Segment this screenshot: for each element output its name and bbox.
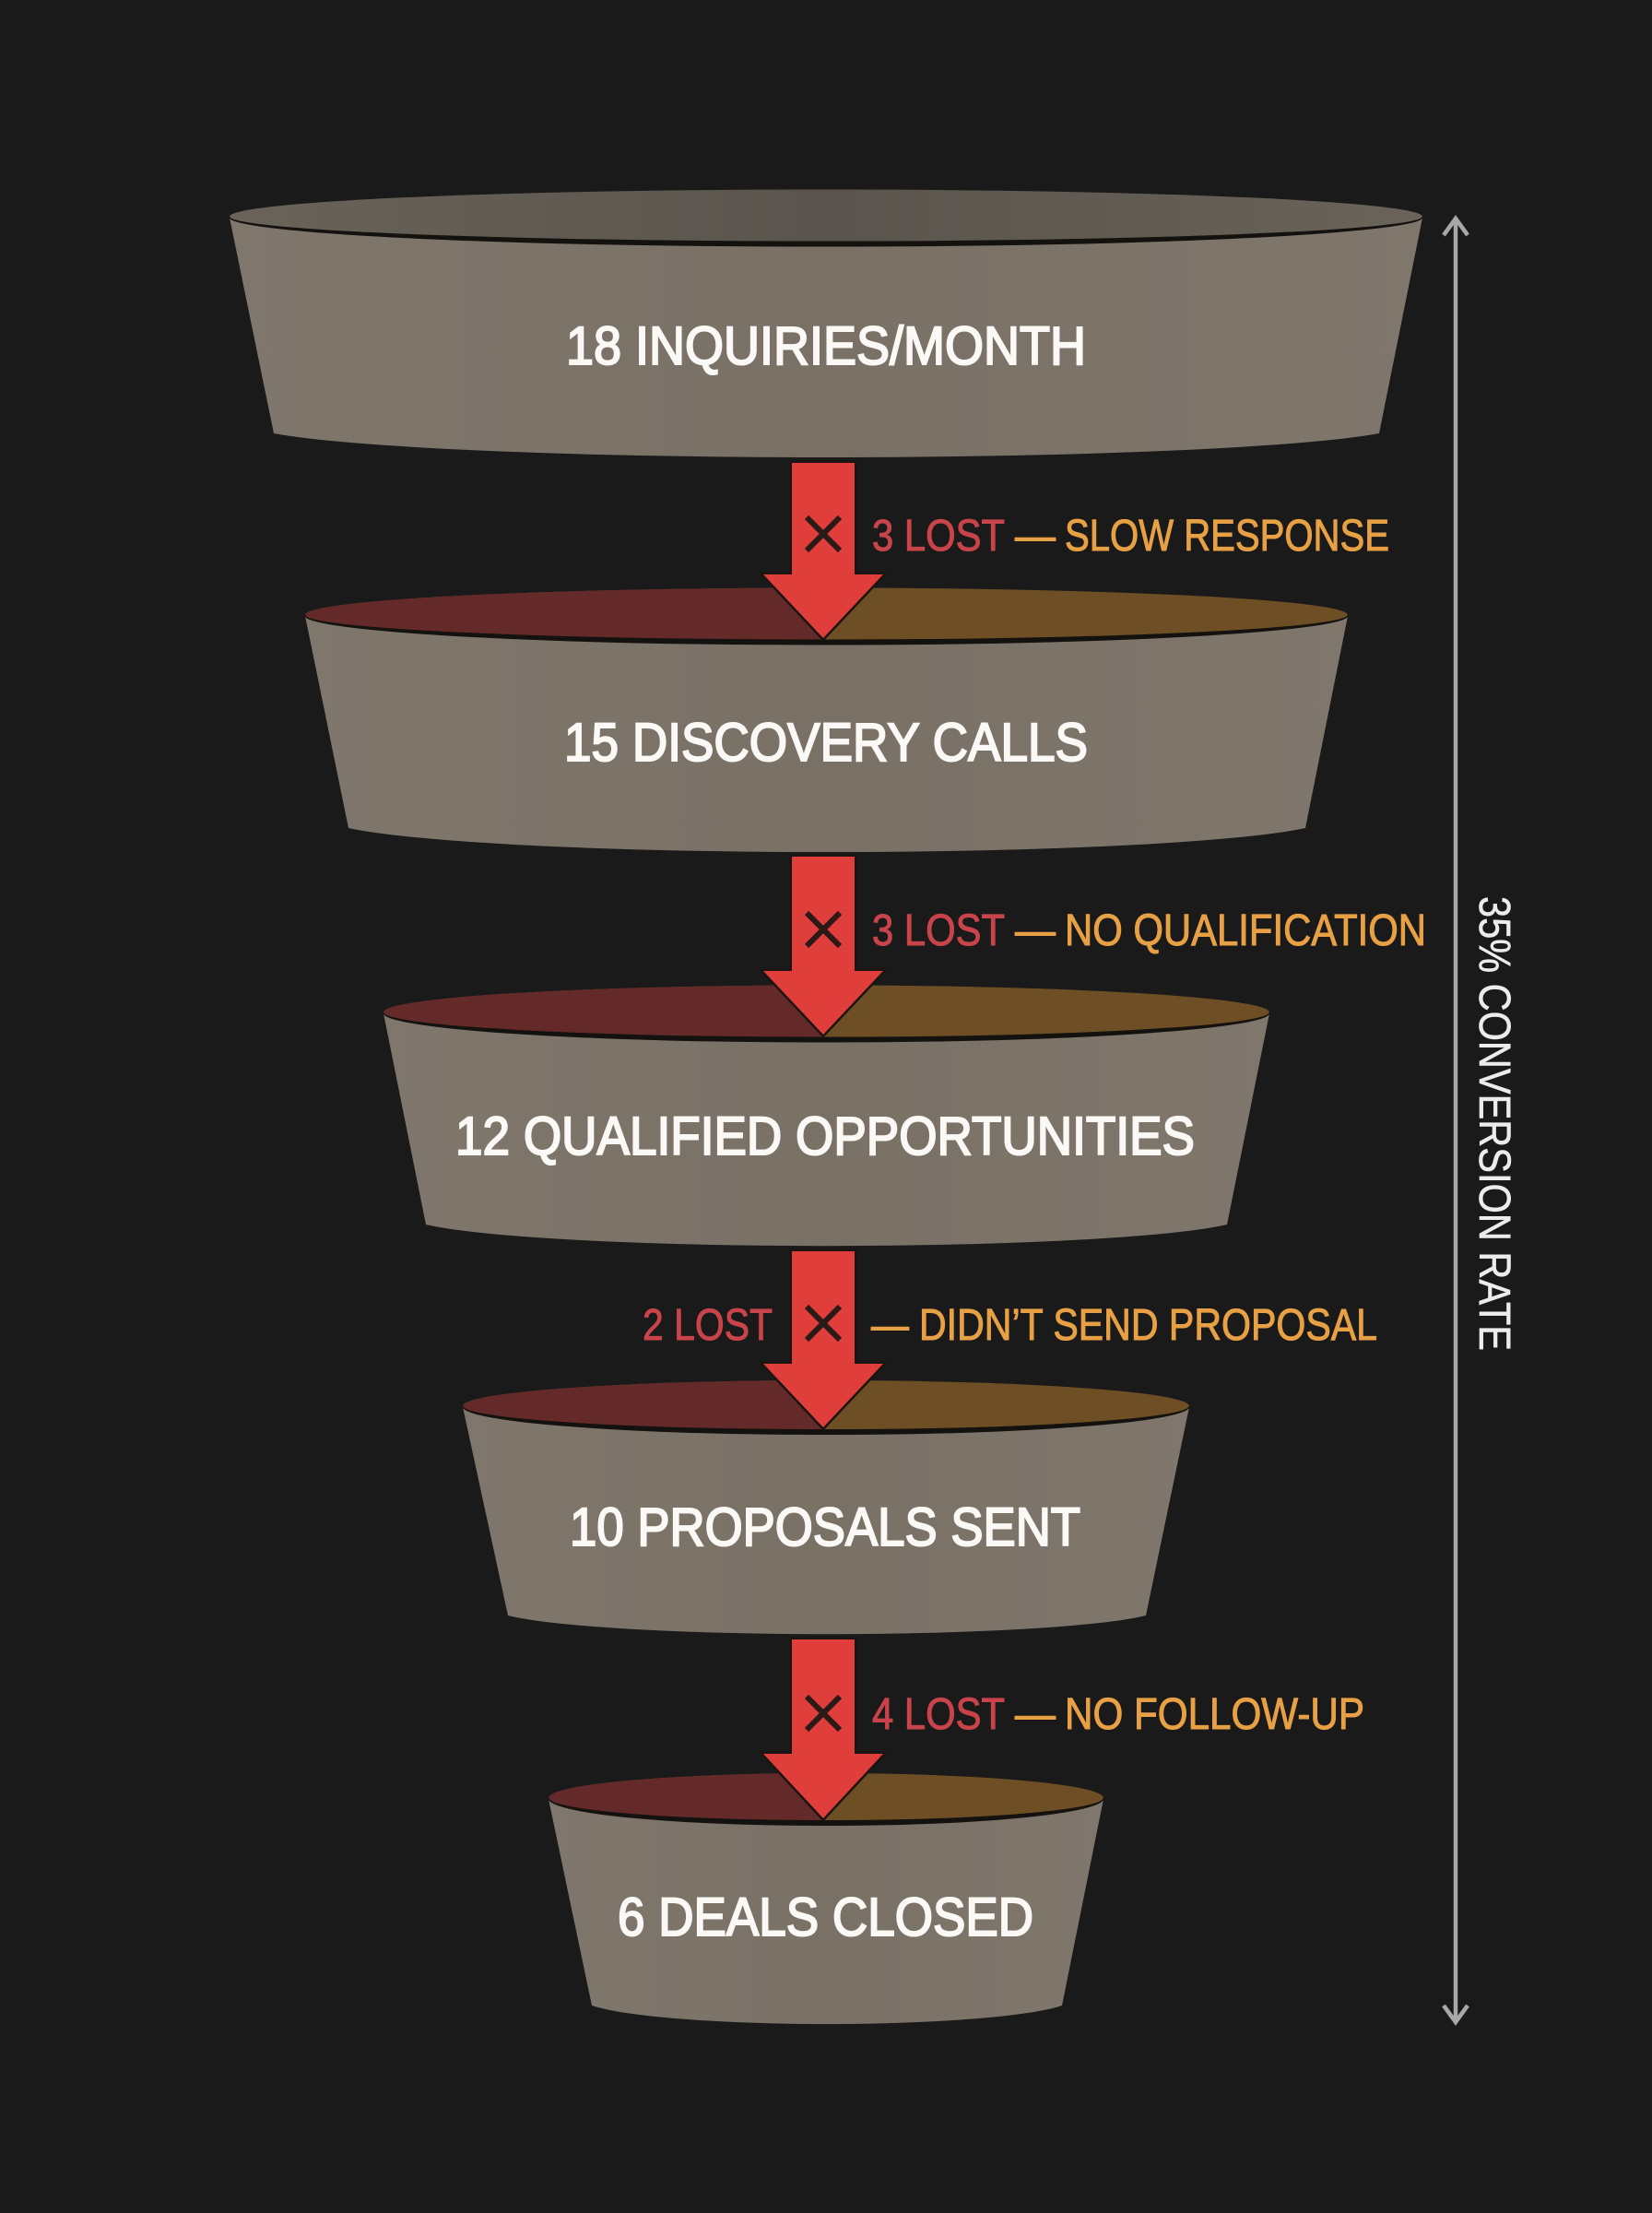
tier 2 label: 15 DISCOVERY CALLS [564, 713, 1088, 773]
tier 5 label: 6 DEALS CLOSED [618, 1888, 1033, 1947]
tier 5 mouth [549, 1773, 1103, 1823]
drop-off 1: arrow and label [763, 463, 1389, 638]
reason 1: — [1015, 512, 1056, 561]
tier 3 label: 12 QUALIFIED OPPORTUNITIES [455, 1106, 1195, 1166]
reason 2: — [1015, 906, 1056, 955]
tier 4 label: 10 PROPOSALS SENT [570, 1497, 1080, 1557]
lost count 4: 4 LOST [872, 1690, 1005, 1739]
drop-off 3: arrow and label [643, 1251, 1377, 1427]
arrow 3 [763, 1251, 883, 1427]
reason 4: NO FOLLOW-UP [1065, 1690, 1364, 1739]
tier 2 body [305, 616, 1348, 852]
funnel tier 1: inquiries [230, 190, 1422, 457]
icon: x mark 2 [807, 913, 840, 946]
tier 4 body [463, 1407, 1189, 1634]
reason 3: DIDN’T SEND PROPOSAL [919, 1301, 1377, 1350]
arrow 1 [763, 463, 883, 638]
reason 4: — [1015, 1690, 1056, 1739]
funnel tier 5: deals closed [549, 1773, 1103, 2024]
funnel tier 3: qualified opportunities [384, 985, 1269, 1246]
lost count 3: 2 LOST [643, 1301, 773, 1350]
tier 2 mouth [305, 588, 1348, 642]
funnel tier 2: discovery calls [305, 588, 1348, 852]
tier 3 body [384, 1013, 1269, 1246]
reason 1: SLOW RESPONSE [1065, 512, 1389, 561]
drop-off 4: arrow and label [763, 1639, 1364, 1818]
reason 3: — [871, 1301, 909, 1350]
tier 1 label: 18 INQUIRIES/MONTH [566, 316, 1086, 376]
tier 3 mouth [384, 985, 1269, 1040]
conversion span arrow [1444, 219, 1468, 2022]
icon: x mark 4 [807, 1697, 840, 1730]
icon: x mark 1 [807, 517, 840, 550]
lost count 1: 3 LOST [872, 512, 1005, 561]
lost count 2: 3 LOST [872, 906, 1005, 955]
conversion rate label: 35% CONVERSION RATE [1469, 896, 1518, 1351]
tier 1 mouth [230, 190, 1422, 243]
drop-off 2: arrow and label [763, 857, 1426, 1035]
reason 2: NO QUALIFICATION [1065, 906, 1426, 955]
tier 5 body [549, 1799, 1103, 2024]
funnel tier 4: proposals sent [463, 1380, 1189, 1634]
tier 1 body [230, 218, 1422, 457]
arrow 2 [763, 857, 883, 1035]
arrow 4 [763, 1639, 883, 1818]
icon: x mark 3 [807, 1307, 840, 1340]
tier 4 mouth [463, 1380, 1189, 1432]
